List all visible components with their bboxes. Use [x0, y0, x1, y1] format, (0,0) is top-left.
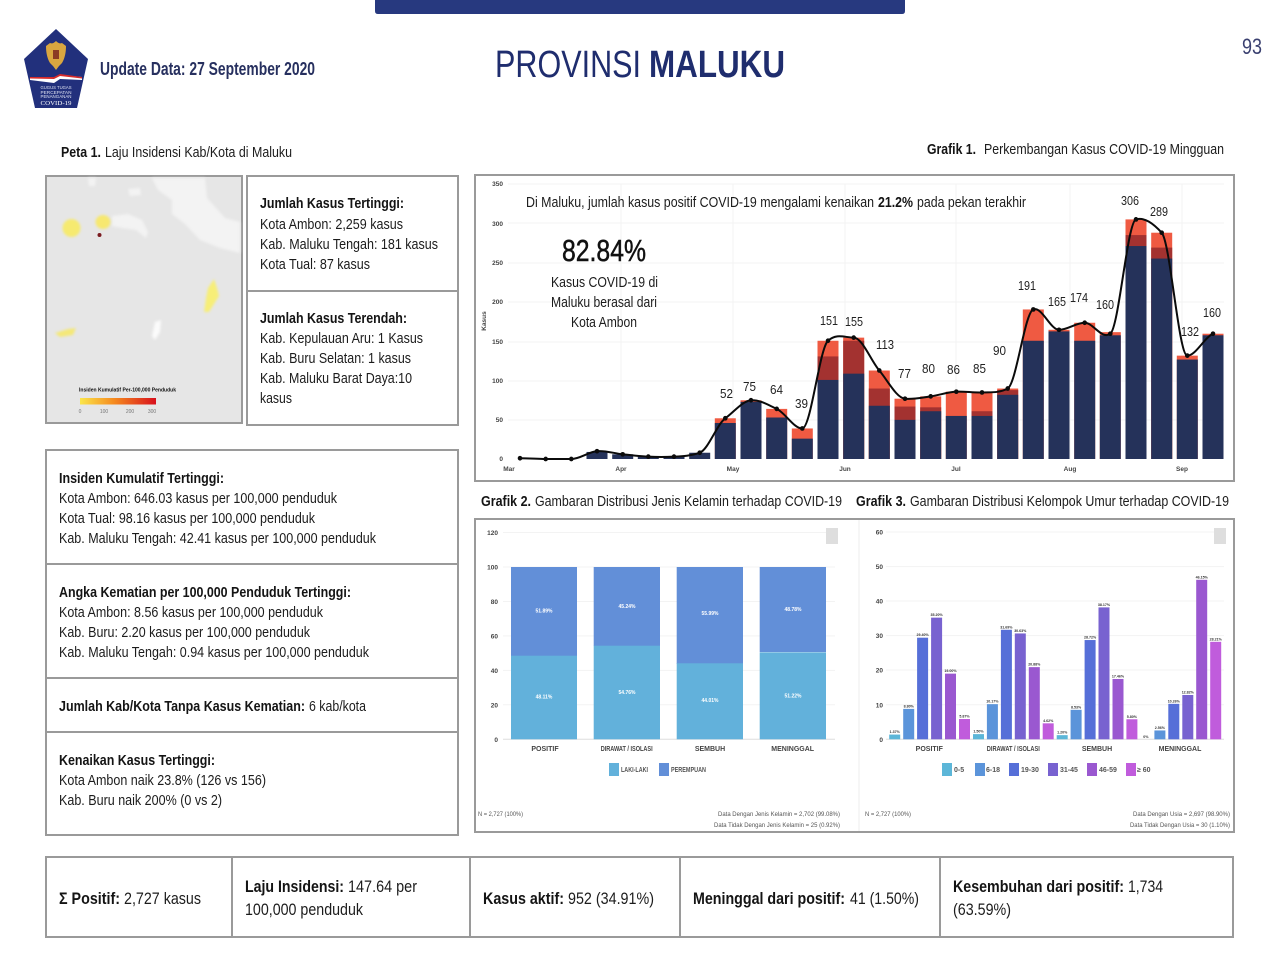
chart 2 bar labels: 51.22%: [785, 694, 802, 700]
heading: chart 3: Gambaran Distribusi Kelompok Umur terhadap COVID-19: [910, 494, 1229, 510]
heading: chart 3: Grafik 3.: [856, 494, 906, 510]
chart 2 legend: LAKI-LAKI: [621, 767, 648, 774]
chart 1 value labels: 85: [973, 361, 986, 376]
chart 1 axes: Jun: [839, 466, 851, 473]
chart 2 categories: [531, 746, 815, 753]
chart 2 legend: [609, 763, 706, 776]
chart 3 bar labels: 29.40%: [916, 633, 929, 637]
panel: map: [46, 176, 242, 423]
top bar: [375, 0, 905, 14]
chart 3 bar labels: 0%: [1143, 735, 1149, 739]
chart 1 axes: 50: [496, 417, 503, 424]
chart 2 bar labels: 48.11%: [536, 694, 553, 700]
chart 1 value labels: 64: [770, 382, 783, 397]
map heading: Peta 1.: [61, 145, 101, 161]
chart 1 headline: Di Maluku, jumlah kasus positif COVID-19 mengalami kenaikan: [526, 195, 874, 211]
chart 1 value labels: 160: [1096, 297, 1114, 312]
chart 3 y axis: 0: [879, 737, 883, 744]
title: PROVINSI: [495, 44, 641, 86]
chart 2 y axis: 60: [491, 633, 498, 640]
logo: Gugus Tugas COVID-19: COVID-19: [40, 100, 72, 107]
title: MALUKU: [649, 44, 785, 86]
panel: lowest cases: Kab. Kepulauan Aru: 1 Kasus: [260, 331, 423, 347]
logo: Gugus Tugas COVID-19: PENANGANAN: [40, 94, 72, 99]
chart 2 y axis: 120: [487, 530, 498, 537]
chart 1 axes: May: [727, 466, 740, 473]
chart 1 value labels: 132: [1181, 324, 1199, 339]
chart 1 headline: pada pekan terakhir: [917, 195, 1026, 211]
chart 1 value labels: 90: [993, 343, 1006, 358]
panel: cumulative incidence: [46, 450, 458, 564]
chart 2 y axis: 20: [491, 702, 498, 709]
panel: highest increase: Kab. Buru naik 200% (0 vs 2): [59, 793, 222, 809]
chart 2 footnotes: [478, 812, 840, 829]
callout: 82.84%: 82.84%: [562, 233, 646, 268]
chart 3 legend: 31-45: [1060, 767, 1078, 774]
map heading: Laju Insidensi Kab/Kota di Maluku: [105, 145, 292, 161]
chart 2 legend: PEREMPUAN: [671, 767, 706, 774]
callout: 82.84%: Maluku berasal dari: [551, 295, 657, 311]
chart 3 bar labels: 5.80%: [1127, 715, 1138, 719]
stat: incidence rate: 147.64 per: [348, 878, 417, 896]
chart 2 footnotes: Data Tidak Dengan Jenis Kelamin = 25 (0.92%): [714, 823, 840, 829]
chart 3 bar labels: 1.50%: [973, 730, 984, 734]
panel: charts 2 and 3 frame: [475, 519, 1234, 832]
stat: total positive: [59, 890, 201, 908]
chart 3 y axis: 10: [876, 702, 883, 709]
panel: lowest cases: [247, 291, 458, 425]
chart 3 legend: ≥ 60: [1137, 767, 1151, 774]
stat: recoveries: 1,734: [1128, 878, 1163, 896]
panel: death rate: Kab. Buru: 2.20 kasus per 100,000 penduduk: [59, 625, 311, 641]
logo: Gugus Tugas COVID-19: PERCEPATAN: [40, 90, 72, 95]
chart 2 y axis: 80: [491, 599, 498, 606]
chart 2 bar labels: 45.24%: [619, 604, 636, 610]
chart 3 bar labels: 35.20%: [930, 613, 943, 617]
stat: deaths: 41 (1.50%): [850, 890, 919, 908]
chart 1 value labels: 77: [898, 366, 911, 381]
panel: highest cases: [247, 176, 458, 291]
panel: death rate: [46, 564, 458, 678]
chart 3 bar labels: 31.69%: [1000, 625, 1013, 629]
chart 3 footnotes: Data Dengan Usia = 2,697 (98.90%): [1133, 812, 1230, 818]
map legend: 0: [79, 409, 82, 415]
chart 2 bar labels: 54.76%: [619, 690, 636, 696]
chart 3 legend: [942, 763, 1151, 776]
chart 2 footnotes: Data Dengan Jenis Kelamin = 2,702 (99.08%): [718, 812, 840, 818]
chart 1 axes: Kasus: [481, 311, 488, 331]
panel: highest increase: [46, 732, 458, 835]
chart 1 value labels: 191: [1018, 278, 1036, 293]
chart 2 y axis: 0: [494, 737, 498, 744]
panel: cumulative incidence: Kota Tual: 98.16 kasus per 100,000 penduduk: [59, 511, 316, 527]
panel: death rate: Angka Kematian per 100,000 Penduduk Tertinggi:: [59, 585, 351, 601]
heading: chart 1: Perkembangan Kasus COVID-19 Mingguan: [984, 142, 1224, 158]
chart 1 axes: Apr: [615, 466, 627, 473]
panel: cumulative incidence: Kab. Maluku Tengah: 42.41 kasus per 100,000 penduduk: [59, 531, 377, 547]
chart 1 value labels: 52: [720, 386, 733, 401]
chart 3 bar labels: 2.56%: [1155, 726, 1166, 730]
panel: death rate: Kab. Maluku Tengah: 0.94 kasus per 100,000 penduduk: [59, 645, 370, 661]
chart 3 y axis: 20: [876, 668, 883, 674]
chart 3 bar labels: 12.82%: [1182, 690, 1195, 694]
chart 1 value labels: 39: [795, 396, 808, 411]
chart 3 footnotes: Data Tidak Dengan Usia = 30 (1.10%): [1130, 823, 1230, 829]
chart 1 axes: 200: [492, 299, 503, 306]
panel: highest cases: Kota Tual: 87 kasus: [260, 257, 370, 273]
chart 1 axes: 150: [492, 339, 503, 346]
chart 1 axes: 250: [492, 260, 503, 267]
panel: highest increase: Kota Ambon naik 23.8% (126 vs 156): [59, 773, 266, 789]
chart 2 categories: POSITIF: [531, 746, 559, 753]
chart 2 categories: SEMBUH: [695, 746, 725, 753]
stat: total positive: Σ Positif:: [59, 890, 120, 908]
chart 3 bar labels: 5.87%: [959, 714, 970, 718]
chart 2 bar labels: 51.89%: [536, 608, 553, 614]
update date: Update Data: 27 September 2020: [100, 59, 315, 79]
panel: lowest cases: Kab. Maluku Barat Daya:10: [260, 371, 412, 387]
page number: 93: [1242, 34, 1262, 59]
chart 3 bars: [889, 580, 1221, 739]
chart 3 bar labels: 28.21%: [1210, 637, 1223, 641]
chart 2 footnotes: N = 2,727 (100%): [478, 812, 523, 818]
chart 3 y axis: [876, 530, 883, 744]
chart 3 bar labels: [890, 575, 1223, 739]
chart 3 bar labels: 8.53%: [1071, 705, 1082, 709]
map legend: [79, 388, 177, 415]
chart 3 y axis: 60: [876, 530, 883, 536]
chart 3 bar labels: 19.00%: [944, 669, 957, 673]
map legend: Insiden Kumulatif Per-100,000 Penduduk: [79, 388, 177, 394]
chart 1 axes: 0: [499, 456, 503, 463]
chart 1 value labels: 160: [1203, 305, 1221, 320]
chart 1 axes: Aug: [1064, 466, 1076, 473]
title: [495, 44, 785, 86]
logo: Gugus Tugas COVID-19: GUGUS TUGAS: [40, 85, 72, 90]
chart 3 bar labels: 1.20%: [1057, 731, 1068, 735]
icon: chart 2 menu: [826, 528, 838, 544]
chart 1 axes: 100: [492, 378, 503, 385]
chart 2 y axis: 40: [491, 668, 498, 675]
chart 1 value labels: 165: [1048, 294, 1066, 309]
stat: active cases: Kasus aktif:: [483, 890, 564, 908]
chart 3 bar labels: 10.26%: [1168, 699, 1181, 703]
chart 1 value labels: 306: [1121, 193, 1139, 208]
panel: no deaths: 6 kab/kota: [309, 699, 367, 715]
panel: highest increase: Kenaikan Kasus Tertinggi:: [59, 753, 215, 769]
panel: summary strip: [46, 857, 1233, 937]
stat: incidence rate: [245, 878, 417, 919]
chart 3 categories: POSITIF: [916, 746, 944, 753]
chart 3 bar labels: 8.80%: [904, 704, 915, 708]
chart 2 y axis: [487, 530, 498, 744]
chart 1 headline: 21.2%: [878, 195, 913, 211]
chart 3 footnotes: [865, 812, 1230, 829]
chart 2 bar labels: 48.78%: [785, 607, 802, 613]
panel: chart 1 weekly cases: [475, 175, 1234, 481]
heading: chart 2: Gambaran Distribusi Jenis Kelamin terhadap COVID-19: [535, 494, 842, 510]
chart 3 categories: SEMBUH: [1082, 746, 1112, 753]
chart 3 categories: MENINGGAL: [1159, 746, 1202, 753]
panel: highest cases: Jumlah Kasus Tertinggi:: [260, 196, 404, 212]
stat: incidence rate: Laju Insidensi:: [245, 878, 344, 896]
chart 3 legend: 6-18: [986, 767, 1000, 774]
chart 3 categories: DIRAWAT / ISOLASI: [987, 746, 1040, 753]
panel: highest cases: Kota Ambon: 2,259 kasus: [260, 217, 403, 233]
chart 1 value labels: 151: [820, 313, 838, 328]
stat: recoveries: [953, 878, 1163, 919]
chart 1 value labels: 289: [1150, 204, 1168, 219]
map legend: 200: [126, 409, 134, 415]
stat: total positive: 2,727 kasus: [124, 890, 201, 908]
callout: 82.84%: Kasus COVID-19 di: [551, 275, 658, 291]
chart 3 y axis: 50: [876, 564, 883, 571]
chart 1 value labels: 113: [876, 337, 894, 352]
chart 3 bar labels: 20.88%: [1028, 663, 1041, 667]
chart 2 bars: [511, 567, 826, 739]
chart 3 bar labels: 46.15%: [1196, 575, 1209, 579]
panel: death rate: Kota Ambon: 8.56 kasus per 100,000 penduduk: [59, 605, 324, 621]
chart 1 axes: [481, 181, 1188, 473]
stat: deaths: Meninggal dari positif:: [693, 890, 845, 908]
panel: no deaths: Jumlah Kab/Kota Tanpa Kasus Kematian:: [59, 699, 305, 715]
stat: recoveries: Kesembuhan dari positif:: [953, 878, 1124, 896]
chart 2 bar labels: 55.99%: [702, 611, 719, 617]
chart 1 value labels: 80: [922, 361, 935, 376]
map legend: 300: [148, 409, 156, 415]
stat: active cases: 952 (34.91%): [568, 890, 654, 908]
icon: chart 3 menu: [1214, 528, 1226, 544]
chart 1 trend line: [518, 217, 1215, 461]
panel: highest cases: Kab. Maluku Tengah: 181 kasus: [260, 237, 438, 253]
chart 2 bar labels: [536, 604, 802, 704]
panel: lowest cases: kasus: [260, 391, 292, 407]
chart 3 bar labels: 38.17%: [1098, 603, 1111, 607]
map legend: 100: [100, 409, 108, 415]
chart 1 axes: Mar: [503, 466, 515, 473]
stat: recoveries: (63.59%): [953, 901, 1011, 919]
map: Kota Ambon marker: [98, 233, 102, 237]
chart 1 stacked bars: [586, 219, 1224, 459]
panel: lowest cases: Jumlah Kasus Terendah:: [260, 311, 407, 327]
chart 3 y axis: 30: [876, 633, 883, 640]
chart 2 categories: MENINGGAL: [771, 746, 815, 753]
panel: no deaths: [46, 678, 458, 732]
logo: Gugus Tugas COVID-19: [24, 29, 88, 108]
chart 3 bar labels: 28.72%: [1084, 636, 1097, 640]
chart 3 bar labels: 30.63%: [1014, 629, 1027, 633]
chart 1 axes: 350: [492, 181, 503, 188]
heading: chart 1: Grafik 1.: [927, 142, 976, 158]
chart 3 bar labels: 1.37%: [890, 730, 901, 734]
chart 2 bar labels: 44.01%: [702, 698, 719, 704]
chart 3 bar labels: 10.17%: [986, 700, 999, 704]
chart 3 legend: 0-5: [954, 767, 964, 774]
chart 2: gender distribution: [478, 520, 859, 831]
chart 3 footnotes: N = 2,727 (100%): [865, 812, 911, 818]
chart 1 axes: Sep: [1176, 466, 1188, 473]
stat: incidence rate: 100,000 penduduk: [245, 901, 364, 919]
callout: 82.84%: [551, 233, 658, 331]
chart 1 value labels: [720, 193, 1221, 411]
chart 3 legend: 19-30: [1021, 767, 1039, 774]
chart 1 value labels: 86: [947, 362, 960, 377]
chart 1 axes: Jul: [951, 466, 961, 473]
chart 3 categories: [916, 746, 1202, 753]
chart 1 value labels: 174: [1070, 290, 1088, 305]
map: affected regions: [55, 215, 219, 337]
chart 1 axes: 300: [492, 221, 503, 228]
panel: cumulative incidence: Insiden Kumulatif Tertinggi:: [59, 471, 224, 487]
panel: lowest cases: Kab. Buru Selatan: 1 kasus: [260, 351, 411, 367]
heading: chart 2: Grafik 2.: [481, 494, 531, 510]
chart 2 y axis: 100: [487, 564, 498, 572]
panel: cumulative incidence: Kota Ambon: 646.03 kasus per 100,000 penduduk: [59, 491, 338, 507]
chart 3 bar labels: 17.46%: [1112, 674, 1125, 678]
chart 1 value labels: 155: [845, 314, 863, 329]
chart 3 y axis: 40: [876, 598, 883, 606]
chart 1 value labels: 75: [743, 379, 756, 394]
chart 3: age distribution: [865, 528, 1230, 829]
chart 3 legend: 46-59: [1099, 767, 1117, 774]
chart 3 bar labels: 4.62%: [1043, 719, 1054, 723]
callout: 82.84%: Kota Ambon: [571, 315, 637, 331]
stat: active cases: [483, 890, 654, 908]
chart 2 categories: DIRAWAT / ISOLASI: [601, 746, 653, 753]
